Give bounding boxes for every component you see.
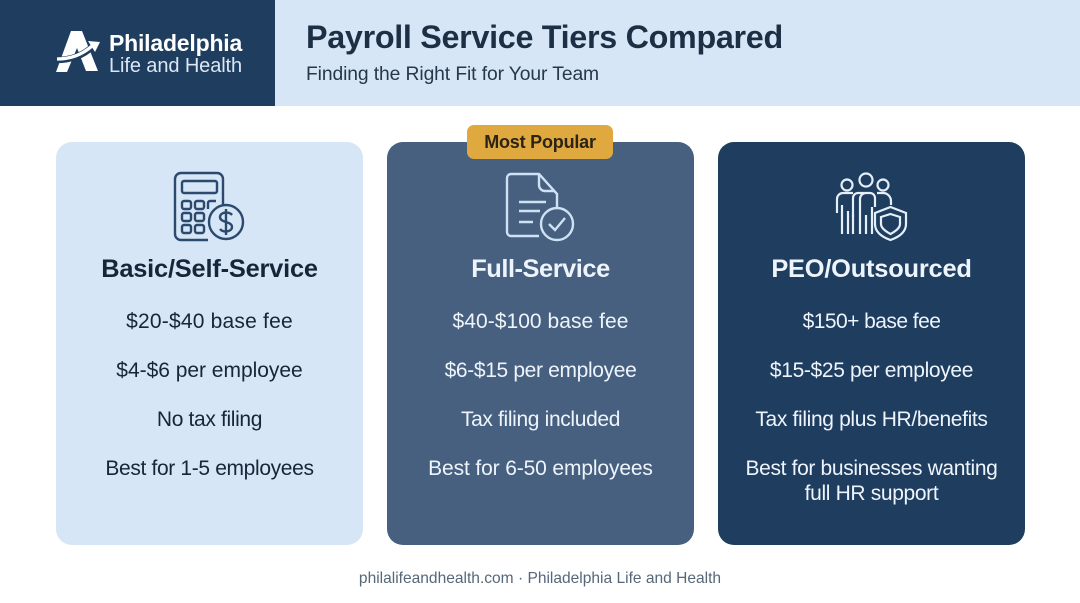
tier details: $15-$25 per employee [770,359,973,382]
tier details: $20-$40 base fee [126,310,293,333]
tier details [428,310,653,480]
tier details [745,310,998,505]
tier details: full HR support [805,482,938,505]
logo text [109,30,242,77]
logo panel [0,0,275,106]
tier details: $40-$100 base fee [452,310,628,333]
panel: peo [718,142,1025,545]
tier details: Best for businesses wanting [745,457,998,480]
footer: philalifeandhealth.com · Philadelphia Life and Health [359,570,721,587]
tier details: Best for 6-50 employees [428,457,653,480]
tier details: $4-$6 per employee [116,359,303,382]
tier details: Tax filing included [461,408,620,431]
tier details: No tax filing [157,408,262,431]
icon: logo mark [56,31,100,72]
tier details: Tax filing plus HR/benefits [755,408,988,431]
badge: most popular: Most Popular [484,132,596,152]
panel: full service [387,142,694,545]
tier details: $150+ base fee [803,310,940,333]
title: Payroll Service Tiers Compared [306,19,783,55]
tier details: $6-$15 per employee [445,359,636,382]
tier details: Best for 1-5 employees [105,457,314,480]
icon: team with shield [836,172,908,242]
icon: calculator with dollar [174,172,244,242]
header band [0,0,1080,106]
logo text: Life and Health [109,55,242,77]
tier name: Basic/Self-Service [101,255,318,283]
badge: most popular [467,125,613,159]
tier name: Full-Service [471,255,610,283]
logo text: Philadelphia [109,30,242,56]
tier name: PEO/Outsourced [771,255,972,283]
panel: basic [56,142,363,545]
icon: document with check [506,172,574,242]
subtitle: Finding the Right Fit for Your Team [306,64,599,85]
tier details [105,310,314,480]
